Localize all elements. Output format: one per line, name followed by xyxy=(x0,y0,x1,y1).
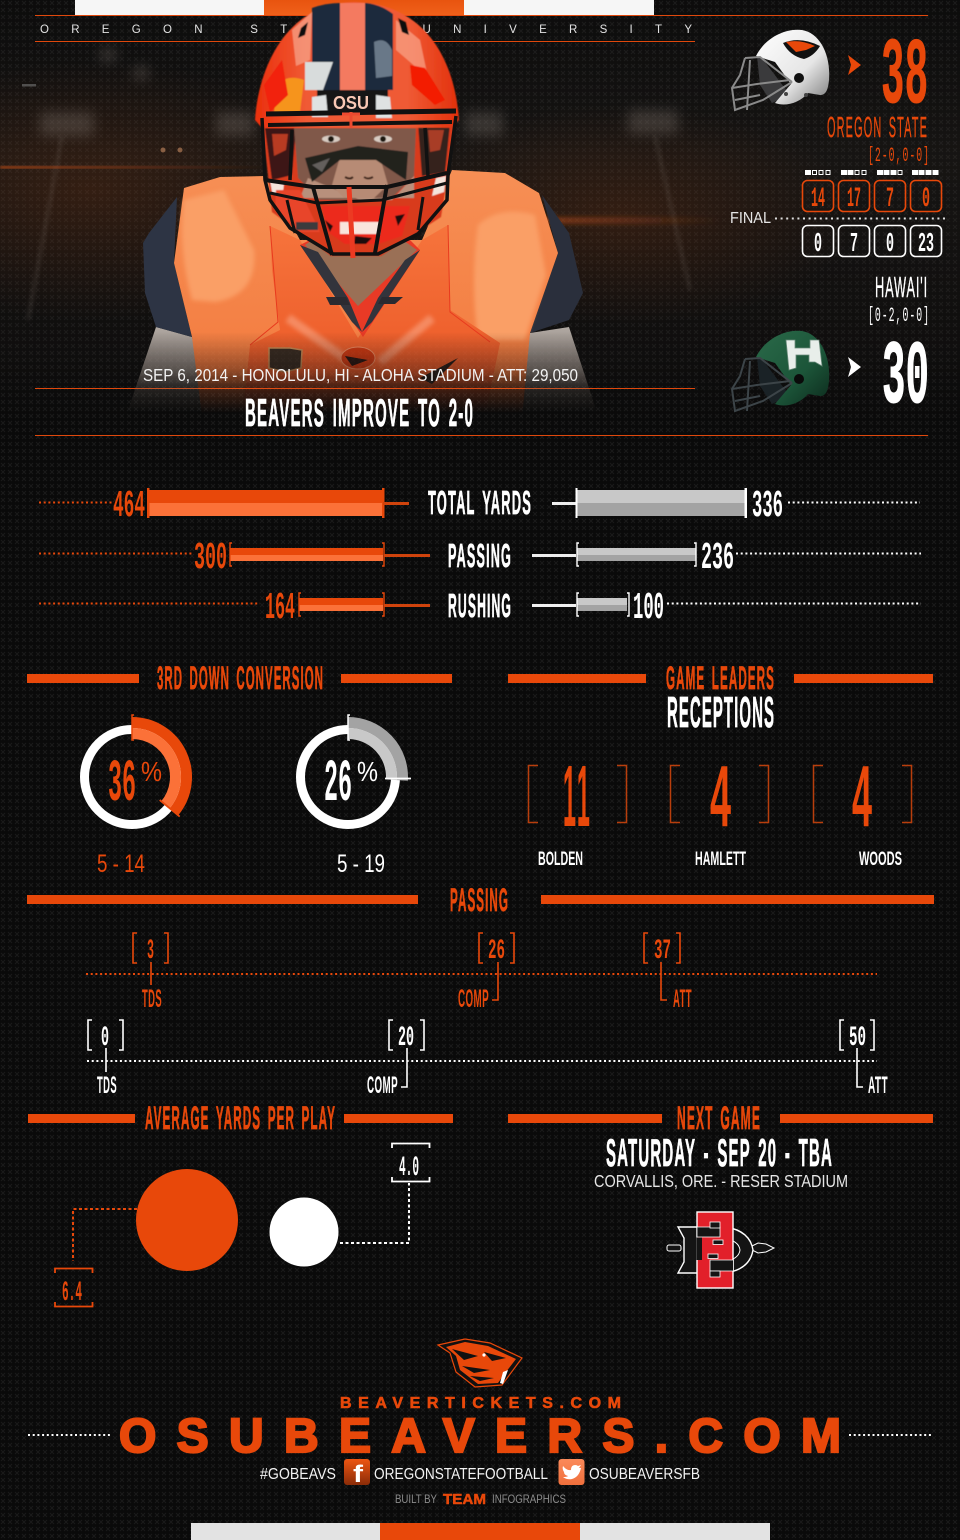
stat row: total yards: 336 xyxy=(752,485,783,528)
stat row: rushing xyxy=(39,587,921,630)
leader: Bolden xyxy=(528,748,626,870)
icon: beaver logo xyxy=(438,1339,522,1387)
heading: average yards per play xyxy=(28,1100,453,1136)
hero rule lines xyxy=(35,15,928,436)
heading: game leaders: GAME LEADERS xyxy=(666,660,775,696)
tickets link: BEAVERTICKETS.COM xyxy=(340,1395,621,1412)
bubble: Oregon State 6.4 yards xyxy=(55,1169,238,1309)
heading: average yards per play: AVERAGE YARDS PER PLAY xyxy=(145,1100,336,1136)
Hawai'i quarter scores: 7 xyxy=(850,230,858,260)
player helmet shell xyxy=(255,2,459,128)
leader: Woods: 4 xyxy=(852,748,872,845)
bubble: Hawai'i 4.0 yards xyxy=(270,1144,430,1266)
Oregon State conversions: 5 - 14 xyxy=(97,850,145,878)
player facemask xyxy=(262,111,456,258)
icon: facebook: f xyxy=(353,1461,364,1488)
facebook handle: OREGONSTATEFOOTBALL xyxy=(374,1466,548,1483)
stat row: passing: 300 xyxy=(194,537,227,580)
final label: FINAL xyxy=(730,210,771,227)
donut chart: Oregon State 36%: % xyxy=(141,756,162,787)
arrow: Oregon State score xyxy=(848,55,861,75)
Hawai'i conversions: 5 - 19 xyxy=(337,850,385,878)
heading: 3rd down conversion: 3RD DOWN CONVERSION xyxy=(157,660,324,696)
text: ATT xyxy=(868,1072,888,1099)
heading: 3rd down conversion xyxy=(27,660,452,696)
passing timeline: Oregon State: COMP xyxy=(458,985,489,1013)
donut chart: Hawai'i 26% xyxy=(300,715,411,824)
Oregon State quarter scores: 14 xyxy=(811,184,825,215)
Oregon State quarter scores: 0 xyxy=(922,184,930,215)
leader: Bolden: 11 xyxy=(563,748,592,845)
passing timeline: Hawai'i: 50 xyxy=(849,1023,866,1054)
heading: passing: PASSING xyxy=(450,882,509,918)
stat row: rushing: 164 xyxy=(265,587,295,630)
stat row: total yards xyxy=(39,484,920,528)
icon: twitter xyxy=(558,1459,584,1485)
leader: Hamlett: 4 xyxy=(710,748,731,845)
icon: San Diego State logo xyxy=(667,1212,774,1288)
text: BEAVERS IMPROVE TO 2-0 xyxy=(245,392,474,435)
heading: passing xyxy=(27,882,934,918)
game details line: SEP 6, 2014 - HONOLULU, HI - ALOHA STADIUM - ATT: 29,050 xyxy=(143,365,578,385)
dotted final divider xyxy=(775,218,946,220)
arrow: Hawai'i score xyxy=(848,357,861,377)
icon: Hawai'i helmet xyxy=(732,331,829,411)
player illustration xyxy=(131,2,594,409)
passing timeline: Hawai'i: 0 xyxy=(101,1023,109,1054)
stat row: passing: PASSING xyxy=(448,537,512,574)
stat row: total yards: 464 xyxy=(113,485,145,528)
Hawai'i quarter scores xyxy=(802,226,942,260)
helmet badge text: OSU xyxy=(333,93,369,113)
icon: Oregon State helmet xyxy=(732,30,829,110)
passing timeline: Hawai'i: TDS xyxy=(97,1072,117,1099)
leader: Bolden: BOLDEN xyxy=(538,849,583,870)
next game location: CORVALLIS, ORE. - RESER STADIUM xyxy=(594,1171,848,1191)
credit line xyxy=(395,1491,566,1508)
leader: Hamlett xyxy=(670,748,768,870)
credit line: TEAM xyxy=(443,1491,486,1508)
passing timeline: Oregon State: ATT xyxy=(673,985,692,1013)
passing timeline: Hawai'i: 20 xyxy=(398,1023,414,1054)
passing timeline: Oregon State xyxy=(86,933,877,1013)
player face xyxy=(262,120,456,256)
passing timeline: Oregon State: 26 xyxy=(488,936,505,967)
icon: facebook xyxy=(344,1459,370,1488)
bubble: Oregon State 6.4 yards: 6.4 xyxy=(62,1278,82,1309)
leader: Woods: WOODS xyxy=(859,849,902,870)
quarter indicators xyxy=(806,170,938,174)
passing timeline: Oregon State: TDS xyxy=(142,985,162,1013)
donut chart: Oregon State 36%: 36 xyxy=(108,751,136,818)
passing timeline: Oregon State: 37 xyxy=(654,936,671,967)
stat row: total yards: TOTAL YARDS xyxy=(428,484,532,521)
bottom colour bars xyxy=(191,1523,770,1540)
Oregon State quarter scores xyxy=(802,180,942,215)
donut chart: Hawai'i 26%: % xyxy=(357,756,378,787)
bubble: Hawai'i 4.0 yards: 4.0 xyxy=(399,1153,419,1184)
Hawai'i quarter scores: 0 xyxy=(814,230,822,260)
passing timeline: Hawai'i: COMP xyxy=(367,1072,398,1099)
website link: OSUBEAVERS.COM xyxy=(119,1410,841,1463)
twitter handle: OSUBEAVERSFB xyxy=(589,1466,700,1483)
hashtag: #GOBEAVS xyxy=(260,1466,336,1483)
stat row: rushing: 100 xyxy=(633,587,664,630)
passing timeline: Hawai'i xyxy=(87,1020,888,1099)
stat row: passing: 236 xyxy=(701,537,734,580)
Hawai'i quarter scores: 0 xyxy=(886,230,894,260)
heading: next game xyxy=(508,1100,933,1136)
heading: next game: NEXT GAME xyxy=(677,1100,761,1136)
donut chart: Oregon State 36% xyxy=(84,715,187,824)
Oregon State quarter scores: 7 xyxy=(886,184,894,215)
stat row: rushing: RUSHING xyxy=(448,587,512,624)
stat row: passing xyxy=(39,537,921,580)
heading: game leaders xyxy=(508,660,933,696)
credit line: INFOGRAPHICS xyxy=(492,1492,566,1506)
credit line: BUILT BY xyxy=(395,1492,437,1506)
Hawai'i quarter scores: 23 xyxy=(918,230,934,260)
Oregon State quarter scores: 17 xyxy=(847,184,861,215)
top colour bars xyxy=(75,0,654,15)
leader: Woods xyxy=(814,748,912,870)
school name strip: OREGON STATE UNIVERSITY xyxy=(40,24,692,36)
donut chart: Hawai'i 26%: 26 xyxy=(324,751,352,818)
leader: Hamlett: HAMLETT xyxy=(695,849,746,870)
passing timeline: Oregon State: 3 xyxy=(147,936,154,967)
hero background with stadium lights and flares xyxy=(0,0,960,445)
player torso xyxy=(131,170,594,409)
